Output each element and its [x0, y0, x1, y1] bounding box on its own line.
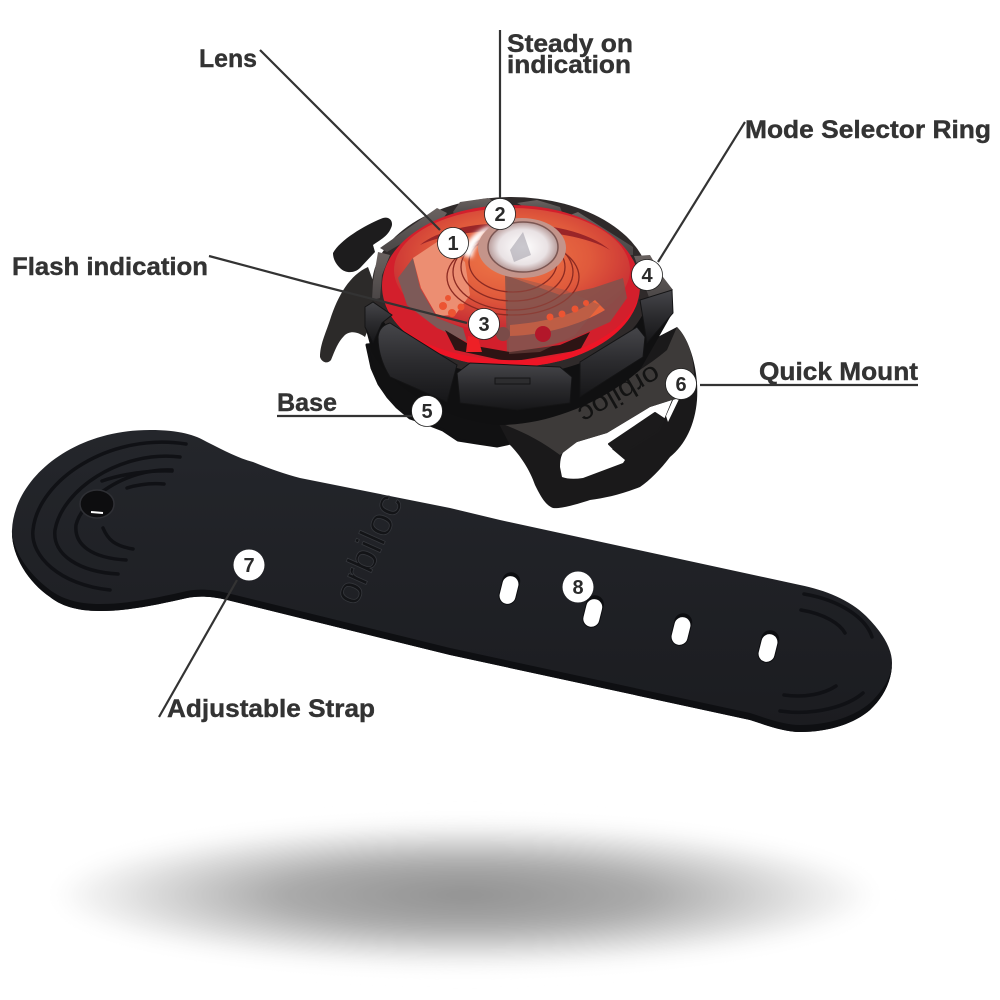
label: Steady on indication: Steady on	[507, 30, 633, 58]
number marker 8	[562, 572, 594, 602]
lens concentric ribs	[447, 232, 579, 315]
mount logo: orbiloc	[573, 359, 666, 430]
strap right-end ridges	[780, 594, 872, 712]
lens top dark band	[420, 223, 610, 250]
number marker 2	[484, 198, 516, 230]
label: Adjustable Strap: Adjustable Strap	[167, 695, 375, 723]
number marker 3: 3	[478, 314, 490, 336]
number marker 7	[234, 550, 264, 580]
number marker 7: 7	[243, 555, 255, 577]
strap adjustment slots	[497, 570, 781, 665]
strap left-end ridges	[33, 442, 186, 590]
LED glare	[462, 224, 495, 258]
lens	[380, 200, 642, 372]
quick mount clip tab	[609, 413, 664, 449]
label: Steady on indication	[507, 30, 633, 79]
number marker 1	[438, 228, 468, 258]
label: Steady on indication: indication	[507, 51, 631, 79]
right grey panel	[505, 275, 627, 355]
number marker 4: 4	[641, 265, 653, 287]
LED dots	[439, 295, 589, 352]
lens centre fold	[507, 275, 600, 354]
lens upper dome	[394, 208, 630, 332]
quick mount opening	[560, 400, 672, 479]
label: Mode Selector Ring: Mode Selector Ring	[745, 116, 991, 144]
strap logo: orbiloc	[326, 488, 411, 611]
top tab	[333, 218, 392, 272]
number marker 4	[632, 260, 662, 290]
number marker 1: 1	[447, 233, 459, 255]
left salmon patch	[413, 240, 470, 316]
ribbed base	[367, 340, 530, 446]
LED star	[510, 232, 531, 262]
adjustable strap	[12, 430, 892, 732]
label: Lens: Lens	[199, 45, 257, 73]
label: Quick Mount: Quick Mount	[759, 358, 919, 386]
number marker 2: 2	[494, 204, 506, 226]
number marker 8: 8	[572, 577, 584, 599]
ground shadow	[53, 823, 877, 967]
lens red base	[380, 200, 642, 370]
dark lower board	[445, 330, 590, 362]
ring black skirt	[366, 300, 673, 425]
number marker 5	[412, 396, 442, 426]
number marker 6	[666, 368, 696, 400]
number marker 5: 5	[421, 401, 433, 423]
light device	[320, 197, 697, 508]
strap eyelet	[80, 490, 114, 518]
LED lens	[488, 222, 558, 272]
right-side slit	[666, 397, 680, 422]
label: Base: Base	[277, 389, 337, 417]
label: Flash indication: Flash indication	[12, 253, 208, 281]
LED housing	[478, 218, 566, 278]
number marker 3	[468, 308, 500, 340]
selector ring body	[372, 197, 650, 375]
ring top segments	[372, 198, 673, 300]
quick mount face	[497, 327, 694, 455]
leader lines	[159, 30, 918, 717]
ring front segments	[365, 290, 673, 410]
left hook	[320, 267, 380, 362]
quick mount lower loop	[497, 327, 697, 508]
left grey stripe	[398, 258, 467, 342]
right orange strip	[510, 300, 605, 336]
number marker 6: 6	[675, 374, 687, 396]
red bottom rim	[385, 300, 638, 366]
